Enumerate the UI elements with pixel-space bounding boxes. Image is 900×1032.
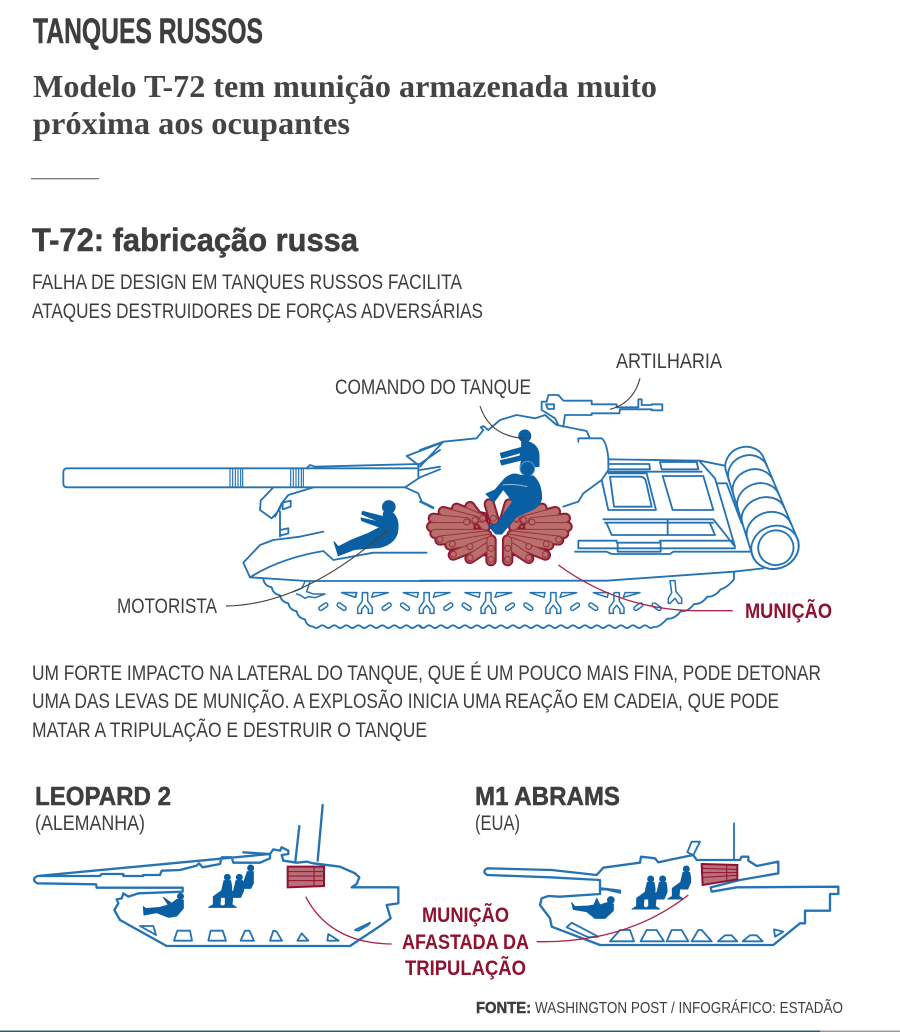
driver figure [334, 501, 398, 556]
road wheels right [465, 581, 682, 613]
source line: FONTE: [476, 1000, 531, 1017]
roadwheels [567, 923, 783, 941]
rear deck [575, 459, 750, 554]
label: motorista: MOTORISTA [117, 595, 217, 618]
T-72 tank diagram [63, 378, 805, 628]
antennas [295, 805, 323, 862]
headline [33, 68, 657, 141]
label: municao: MUNIÇÃO [745, 600, 832, 623]
ammunition box [702, 864, 737, 885]
title: TANQUES RUSSOS [33, 12, 263, 51]
Leopard 2 tank diagram [34, 805, 398, 946]
headline: Modelo T-72 tem munição armazenada muito [33, 68, 657, 104]
source line [476, 997, 843, 1017]
track left [263, 579, 421, 628]
section description: FALHA DE DESIGN EM TANQUES RUSSOS FACILITA [32, 271, 462, 294]
hull outline [34, 847, 398, 946]
callout: municao afastada da tripulacao [402, 904, 529, 980]
callout: municao afastada da tripulacao: AFASTADA DA [402, 931, 529, 954]
M1 Abrams tank diagram [484, 823, 838, 945]
rear fuel drum roller [716, 440, 805, 576]
source line: WASHINGTON POST / INFOGRÁFICO: ESTADÃO [535, 997, 843, 1017]
gunner figure [486, 461, 542, 534]
gun barrel [63, 464, 418, 487]
motorista leader [226, 529, 388, 606]
hull outline [484, 855, 838, 945]
municao leader [558, 565, 733, 611]
label: artilharia: ARTILHARIA [616, 350, 722, 373]
comando leader [480, 406, 525, 438]
label: comando do tanque: COMANDO DO TANQUE [335, 376, 531, 399]
roadwheels [140, 923, 370, 941]
hull and track right [420, 568, 763, 628]
driver figure [572, 897, 614, 918]
heading: Leopard 2: (ALEMANHA) [35, 812, 145, 835]
section description: ATAQUES DESTRUIDORES DE FORÇAS ADVERSÁRIAS [32, 300, 483, 323]
explanation text [32, 662, 821, 742]
heading: M1 Abrams: M1 ABRAMS [475, 781, 620, 811]
leader [537, 895, 688, 942]
leader [306, 897, 392, 944]
commander figure [500, 430, 539, 467]
machine gun [542, 395, 662, 427]
ammunition carousel [432, 504, 567, 562]
explanation text: MATAR A TRIPULAÇÃO E DESTRUIR O TANQUE [32, 718, 427, 742]
driver figure [143, 893, 184, 917]
heading: M1 Abrams: (EUA) [475, 812, 520, 835]
seated crew [632, 866, 691, 909]
artilharia leader [610, 378, 640, 409]
heading: Leopard 2: LEOPARD 2 [35, 781, 171, 811]
section description [32, 271, 483, 323]
road wheels left [293, 582, 472, 613]
callout: municao afastada da tripulacao: MUNIÇÃO [422, 904, 509, 927]
hatch [687, 842, 700, 855]
callout: municao afastada da tripulacao: TRIPULAÇÃO [405, 957, 526, 980]
heading: Leopard 2 [35, 781, 171, 835]
turret front and hull front [243, 443, 440, 581]
heading: M1 Abrams [475, 781, 620, 835]
ammunition box [288, 867, 324, 887]
seated crew [209, 865, 254, 907]
antenna [731, 823, 737, 860]
headline: próxima aos ocupantes [33, 105, 350, 141]
section heading: T-72: fabricação russa [32, 222, 358, 258]
turret [420, 415, 608, 508]
